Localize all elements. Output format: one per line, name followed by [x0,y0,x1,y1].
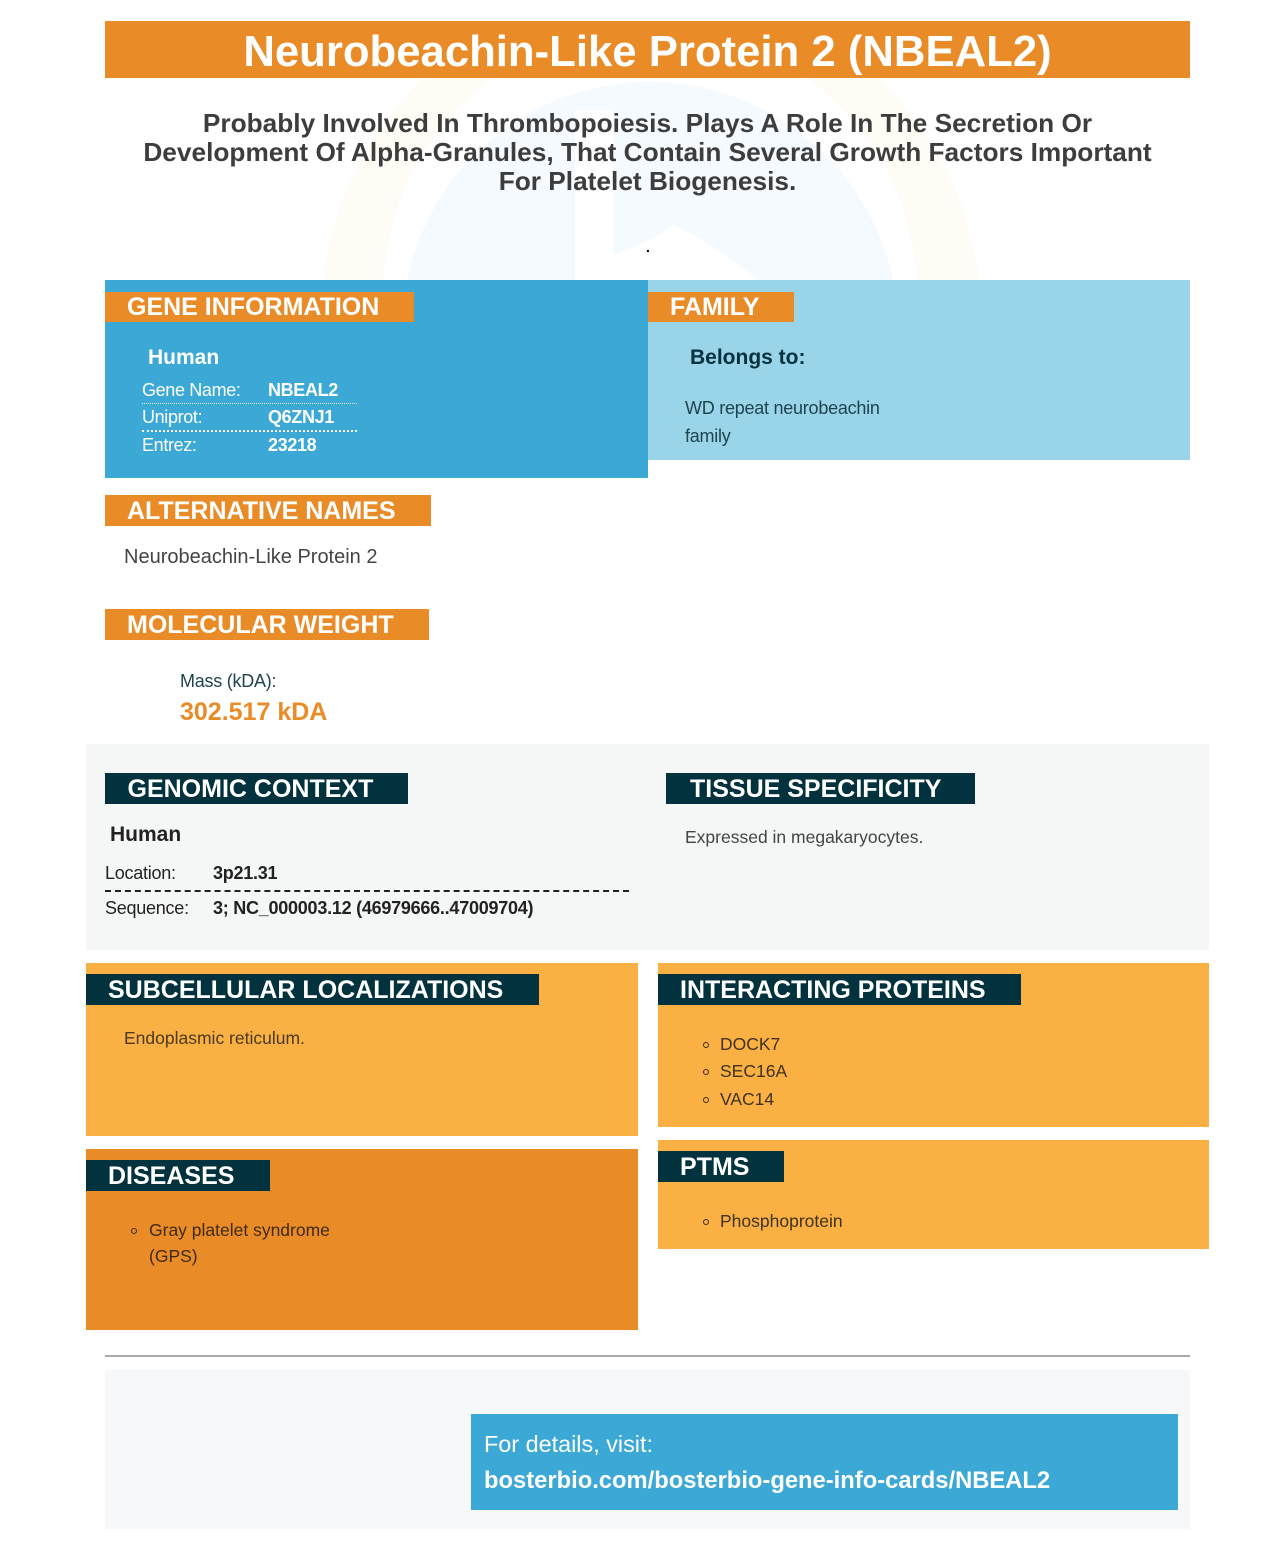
ptm list: Phosphoprotein [720,1211,843,1231]
heading: family [648,292,794,322]
callout label: For details, visit: [484,1431,653,1457]
location row [105,863,277,883]
protein list: SEC16A [720,1061,787,1081]
panel: family [648,280,1190,460]
panel: subcellular localizations [86,963,638,1136]
location row: 3p21.31 [213,863,277,883]
heading: diseases: DISEASES [108,1162,234,1190]
gene table [142,380,357,455]
family label: Belongs to: [690,346,806,369]
mass value: 302.517 kDA [180,698,327,726]
location row: Location: [105,863,176,883]
panel: ptms [658,1140,1209,1249]
disease list: (GPS) [149,1246,198,1266]
protein list: DOCK7 [720,1034,780,1054]
subtitle [143,108,1152,196]
panel: diseases [86,1149,638,1330]
panel: footer [105,1370,1190,1529]
heading: gene information: GENE INFORMATION [127,293,379,321]
panel: genomic band [86,744,1209,950]
family text: WD repeat neurobeachin [685,398,880,418]
species label: Human [148,346,219,369]
gene table: Q6ZNJ1 [268,407,334,427]
heading: subcellular localizations: SUBCELLULAR LOCALIZATIONS [108,976,503,1004]
species label: Human [110,823,181,846]
heading: diseases [86,1160,270,1191]
mass label: Mass (kDA): [180,671,276,691]
alternative names text: Neurobeachin-Like Protein 2 [124,546,378,568]
callout url: bosterbio.com/bosterbio-gene-info-cards/NBEAL2 [484,1467,1050,1494]
subtitle: For Platelet Biogenesis. [499,166,796,196]
family text [685,398,880,446]
dot note: . [646,239,650,255]
callout: details link [471,1414,1178,1510]
sequence row: 3; NC_000003.12 (46979666..47009704) [213,898,533,918]
gene table: 23218 [268,435,316,455]
protein list: VAC14 [720,1089,774,1109]
heading: ptms [658,1151,784,1182]
disease list: Gray platelet syndrome [149,1220,330,1240]
gene table: Gene Name: [142,380,241,400]
heading: ptms: PTMS [680,1153,749,1181]
heading: molecular weight: MOLECULAR WEIGHT [127,611,394,639]
subtitle: Probably Involved In Thrombopoiesis. Plays A Role In The Secretion Or [203,108,1092,138]
heading: genomic context: GENOMIC CONTEXT [128,775,373,803]
family text: family [685,426,731,446]
panel: interacting proteins [658,963,1209,1127]
disease list [131,1220,330,1266]
heading: interacting proteins: INTERACTING PROTEINS [680,976,986,1004]
gene table: Uniprot: [142,407,202,427]
heading: alternative names: ALTERNATIVE NAMES [127,497,396,525]
sequence row: Sequence: [105,898,189,918]
heading: family: FAMILY [670,293,759,321]
title banner: Neurobeachin-Like Protein 2 (NBEAL2) [243,27,1052,76]
localization text: Endoplasmic reticulum. [124,1028,305,1048]
subtitle: Development Of Alpha-Granules, That Contain Several Growth Factors Important [143,137,1152,167]
panel: gene information [105,280,648,478]
protein list [703,1034,788,1109]
gene table: Entrez: [142,435,197,455]
heading: tissue specificity: TISSUE SPECIFICITY [690,775,941,803]
title banner [105,21,1190,78]
tissue specificity text: Expressed in megakaryocytes. [685,827,923,847]
gene table: NBEAL2 [268,380,338,400]
watermark logo [324,78,978,280]
